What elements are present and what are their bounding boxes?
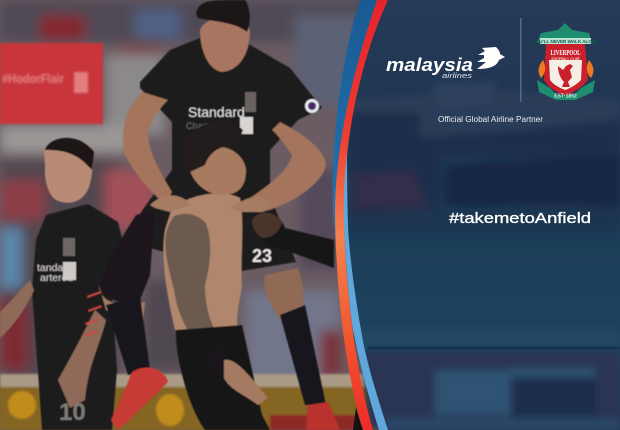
hashtag: takemetoAnfield: #takemetoAnfield (449, 211, 591, 227)
Liverpool FC crest: EST·1892 (554, 94, 577, 100)
player: left, black kit: 10 (59, 399, 86, 426)
player: left, black kit (0, 138, 125, 430)
malaysia airlines logo: malaysia (386, 55, 473, 75)
Liverpool FC crest (533, 23, 598, 100)
player: left, black kit: artered (40, 272, 73, 284)
player: left, black kit: tandard (37, 262, 73, 274)
player: top, jumping: Chartered (186, 121, 226, 131)
icon: wau kite logo mark (477, 47, 505, 69)
player: top, jumping: Standard (188, 104, 245, 120)
photo: blurred stadium crowd background (0, 0, 380, 430)
tagline: Official Global Airline Partner: Official Global Airline Partner (438, 114, 543, 124)
navy panel with faded Anfield stadium (344, 0, 620, 430)
Liverpool FC crest: YOU'LL NEVER WALK ALONE (533, 39, 598, 44)
player: centre, shirtless (150, 122, 334, 430)
upper legs (100, 210, 155, 302)
divider between logos (520, 18, 522, 102)
Liverpool FC crest: FOOTBALL CLUB (552, 56, 580, 62)
player: top, jumping (99, 0, 340, 430)
red advertising board (0, 43, 103, 124)
stripe: dark blue (333, 0, 380, 245)
pitch-side advertising boards (0, 374, 380, 430)
player: top, jumping: 23 (252, 246, 272, 266)
black wedge beside ribbon (353, 407, 363, 430)
curved ribbon: blue, red-orange and light blue stripes (333, 0, 388, 430)
players group (0, 0, 340, 430)
icon: eternal flames (539, 60, 593, 78)
red advertising board: #HodorFlair (2, 72, 64, 86)
stripe: red to orange (335, 0, 388, 430)
Liverpool FC crest: LIVERPOOL (550, 48, 580, 57)
malaysia airlines logo: airlines (442, 71, 472, 80)
icon: liver bird (558, 64, 573, 87)
malaysia airlines logo (386, 47, 505, 80)
stripe: light blue (343, 130, 388, 430)
